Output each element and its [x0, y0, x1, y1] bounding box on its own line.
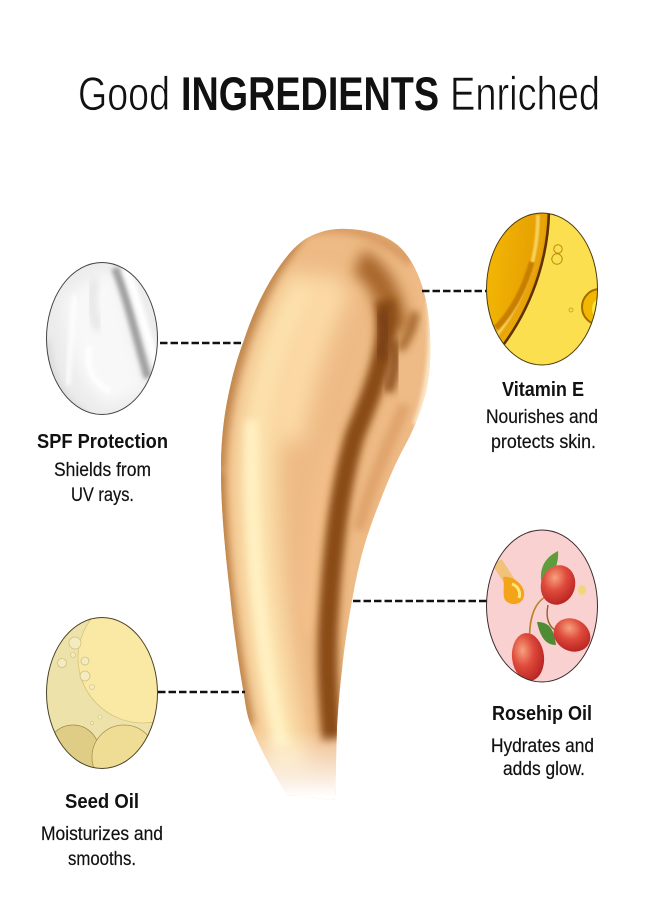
- text block: SPF Protection: UV rays.: [71, 485, 134, 506]
- cream swatch: [221, 228, 430, 800]
- text block: SPF Protection: Shields from: [54, 460, 151, 481]
- connector: Vitamin E: [422, 290, 487, 292]
- title: Good: [78, 67, 170, 120]
- icon: Rosehip fruit and oil: [486, 530, 598, 682]
- text block: Seed Oil: Seed Oil: [65, 791, 139, 813]
- text block: Seed Oil: Moisturizes and: [41, 824, 163, 845]
- text block: Seed Oil: [41, 791, 163, 870]
- text block: Vitamin E: Nourishes and: [486, 407, 598, 428]
- connector: Seed Oil: [158, 691, 245, 693]
- text block: Rosehip Oil: [491, 703, 594, 780]
- text block: Rosehip Oil: adds glow.: [503, 759, 585, 780]
- icon: Vitamin E oil: [486, 212, 598, 366]
- icon: SPF cream texture: [46, 262, 158, 415]
- text block: Rosehip Oil: Hydrates and: [491, 736, 594, 757]
- text block: Vitamin E: Vitamin E: [502, 379, 584, 401]
- connector: SPF Protection: [160, 342, 243, 344]
- text block: Vitamin E: [486, 379, 598, 453]
- text block: Vitamin E: protects skin.: [491, 432, 596, 453]
- text block: SPF Protection: SPF Protection: [37, 431, 168, 453]
- connector: Rosehip Oil: [353, 600, 487, 602]
- title: INGREDIENTS: [181, 67, 439, 120]
- title: [78, 67, 600, 120]
- text block: Seed Oil: smooths.: [68, 849, 136, 870]
- text block: SPF Protection: [37, 431, 168, 506]
- icon: Seed oil bubbles: [46, 617, 158, 769]
- text block: Rosehip Oil: Rosehip Oil: [492, 703, 592, 725]
- title: Enriched: [450, 67, 600, 120]
